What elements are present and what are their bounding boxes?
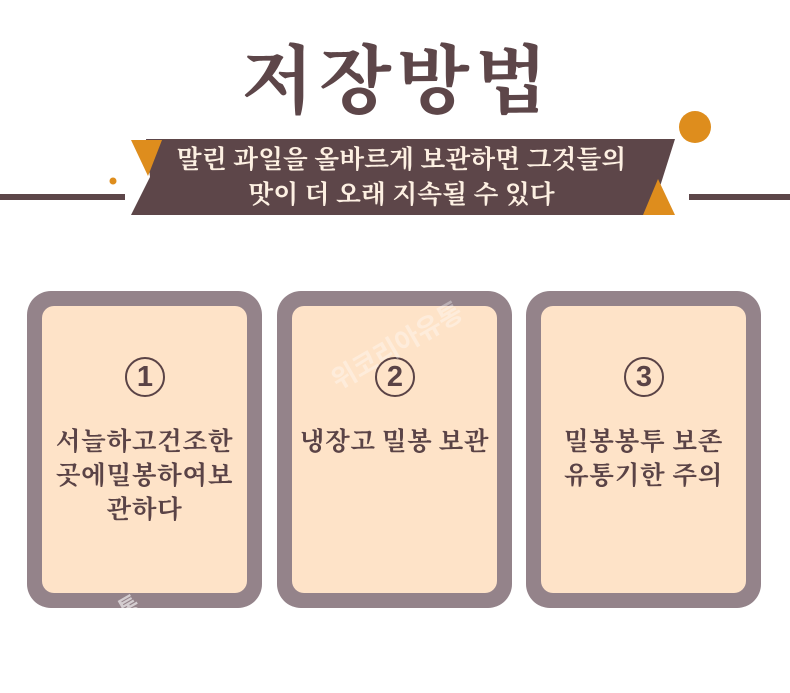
panel: card 2: [277, 291, 512, 608]
number 1: [125, 357, 165, 397]
title: 저장방법: [241, 41, 553, 124]
number 1: 1: [137, 361, 153, 393]
small dot: [110, 178, 116, 184]
text 3: 밀봉봉투 보존: [564, 427, 723, 456]
text 1: [56, 427, 233, 524]
number 3: 3: [636, 361, 652, 393]
text 1: 관하다: [106, 495, 182, 524]
orange circle: [679, 111, 711, 143]
text 3: [564, 427, 723, 490]
panel: card 3: [526, 291, 761, 608]
text 1: 서늘하고건조한: [56, 427, 233, 456]
right line: [689, 194, 790, 200]
ribbon: [131, 139, 675, 215]
orange triangle right bottom: [643, 179, 675, 215]
text 1: 곳에밀봉하여보: [56, 461, 233, 490]
left line: [0, 194, 125, 200]
subtitle text: [177, 145, 626, 209]
subtitle text: 말린 과일을 올바르게 보관하면 그것들의: [177, 145, 626, 174]
number 2: 2: [387, 361, 403, 393]
subtitle text: 맛이 더 오래 지속될 수 있다: [248, 180, 555, 209]
text 3: 유통기한 주의: [564, 461, 723, 490]
orange triangle left top: [131, 140, 162, 176]
text 2: 냉장고 밀봉 보관: [300, 427, 489, 456]
number 2: [375, 357, 415, 397]
banner with subtitle: [0, 111, 790, 215]
watermark: 위코리아유통: [326, 296, 468, 396]
number 3: [624, 357, 664, 397]
panel: card 1: [27, 291, 262, 608]
